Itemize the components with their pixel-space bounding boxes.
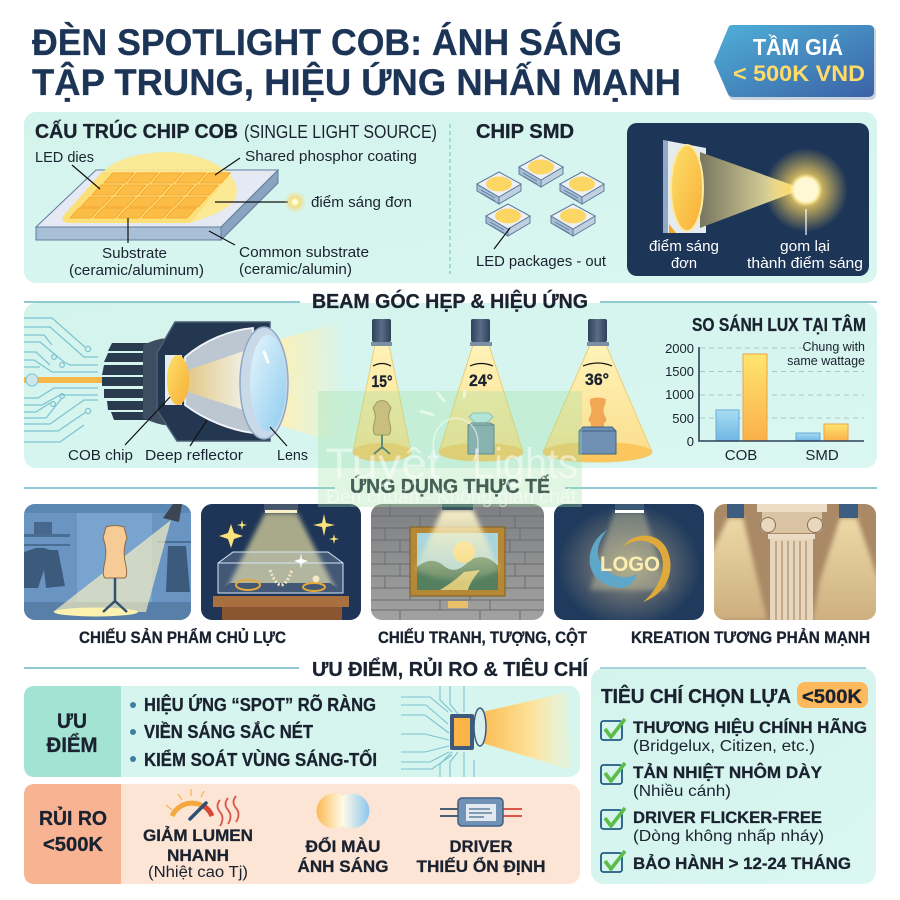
callouts: COB chip: LED dies [35,149,94,166]
panel: beam angles [24,303,877,468]
caption: retail and jewellery: CHIẾU SẢN PHẨM CHỦ LỰC [79,628,286,647]
criterion: heat sink [601,763,823,800]
heading: COB chip structure: CẤU TRÚC CHIP COB [35,119,238,143]
beam 24 degrees: 24° [469,371,493,390]
heading: COB chip structure: (SINGLE LIGHT SOURCE) [244,122,437,142]
chart: lux comparison [665,314,866,464]
panel: advantages: ƯU [57,710,87,733]
chart: lux comparison: COB [725,447,757,464]
watermark: Tuyệt [325,440,440,488]
panel: risks: <500K [43,834,104,856]
price tag: <500K [802,687,862,708]
risk: colour shift: ÁNH SÁNG [298,857,388,876]
criterion: warranty: BẢO HÀNH > 12-24 THÁNG [633,854,851,873]
title [32,22,681,103]
risk: lumen drop [143,789,253,881]
heading: COB chip structure [35,119,437,143]
circuit traces [24,318,98,442]
watermark: Đèn chuẩn - Không gian chất [326,487,577,508]
diagram: SMD packages: LED packages - out [476,253,607,270]
criterion: brand: (Bridgelux, Citizen, etc.) [633,738,815,755]
advantage list [130,694,377,770]
diagram: COB chip [36,152,278,240]
criterion: driver: (Dòng không nhấp nháy) [633,828,824,845]
beam 36 degrees: 36° [585,370,609,389]
advantage list: HIỆU ỨNG “SPOT” RÕ RÀNG [144,694,376,715]
price tag [797,682,868,708]
risk: lumen drop: GIẢM LUMEN [143,826,253,845]
watermark [318,390,582,508]
caption: paintings and columns: CHIẾU TRANH, TƯỢNG, CỘT [378,628,587,647]
callouts: COB chip: (ceramic/alumin) [239,261,352,278]
risk: lumen drop: NHANH [167,846,229,865]
panel: chip structure [24,112,877,283]
chart: lux comparison: same wattage [787,354,865,368]
criterion: heat sink: (Nhiều cánh) [633,783,731,800]
panel: advantages [24,686,580,777]
panel: risks: RỦI RO [39,806,107,830]
diagram: COB spotlight: COB chip [68,447,133,464]
title: ĐÈN SPOTLIGHT COB: ÁNH SÁNG [32,22,622,63]
application: framed painting [371,504,544,620]
diagram: COB spotlight [24,322,345,464]
price badge: TẦM GIÁ [753,33,843,60]
application: logo wall: LOGO [600,553,660,576]
panel: selection criteria [591,668,876,884]
title: TẬP TRUNG, HIỆU ỨNG NHẤN MẠNH [32,61,681,103]
risk: unstable driver: DRIVER [450,837,512,856]
dark panel: light converging: thành điểm sáng [747,255,863,272]
callouts: COB chip [35,148,417,279]
risk: unstable driver [416,798,546,876]
advantage list: VIỀN SÁNG SẮC NÉT [144,721,313,742]
price badge [714,25,876,100]
chart: lux comparison: 1000 [665,387,694,402]
application: logo wall [554,504,704,628]
caption: contrast creation: KREATION TƯƠNG PHẢN MẠNH [631,628,870,647]
criterion: driver: DRIVER FLICKER-FREE [633,808,822,827]
application: retail mannequin [24,504,191,620]
diagram: COB spotlight: Deep reflector [145,447,243,464]
dark panel: light converging: đơn [671,255,697,272]
callouts: COB chip: điểm sáng đơn [311,194,412,211]
callouts: COB chip: Common substrate [239,244,369,261]
chart: lux comparison: Chung with [802,340,865,354]
chart: lux comparison: 0 [687,434,694,449]
chart title: SO SÁNH LUX TẠI TÂM [692,314,866,335]
icon: chip with light beam [401,686,572,777]
criterion: heat sink: TẢN NHIỆT NHÔM DÀY [633,763,823,782]
panel: advantages: ĐIỂM [46,734,98,757]
heading: beam section: BEAM GÓC HẸP & HIỆU ỨNG [312,289,588,313]
dark panel: light converging: điểm sáng [649,238,719,255]
advantage list: KIỂM SOÁT VÙNG SÁNG-TỐI [144,749,377,770]
diagram: COB spotlight: Lens [277,447,308,464]
callouts: COB chip: (ceramic/aluminum) [69,262,204,279]
risk: lumen drop: (Nhiệt cao Tj) [148,864,248,881]
beam 24 degrees [439,319,523,461]
risk: colour shift [298,794,388,876]
watermark: Lights [472,440,578,488]
chart: lux comparison: 1500 [665,364,694,379]
panel: risks [24,784,580,884]
dark panel: light converging: gom lại [780,238,830,255]
risk: unstable driver: THIẾU ỔN ĐỊNH [416,857,546,876]
beam 36 degrees [543,319,652,462]
price badge: < 500K VND [733,61,865,86]
criterion: driver [601,808,824,845]
callouts: COB chip: Shared phosphor coating [245,148,417,165]
heading: SMD chip: CHIP SMD [476,121,574,143]
application: textured wall and column [708,504,880,625]
chart: lux comparison: 500 [672,411,694,426]
application: jewellery display [201,504,361,620]
diagram: SMD packages [476,155,607,270]
panel: selection criteria: TIÊU CHÍ CHỌN LỰA [601,684,791,708]
heading: applications section: ỨNG DỤNG THỰC TẾ [350,474,550,498]
criterion: brand: THƯƠNG HIỆU CHÍNH HÃNG [633,717,867,737]
heading: pros, risks and criteria section: ƯU ĐIỂM, RỦI RO & TIÊU CHÍ [312,657,588,681]
beam 15 degrees [353,319,411,461]
criterion: brand [601,717,867,755]
dark panel: light converging [627,123,869,276]
callouts: COB chip: Substrate [102,245,167,262]
chart: lux comparison: SMD [805,447,839,464]
beam 15 degrees: 15° [372,372,393,391]
risk: colour shift: ĐỔI MÀU [306,837,380,856]
chart: lux comparison: 2000 [665,341,694,356]
